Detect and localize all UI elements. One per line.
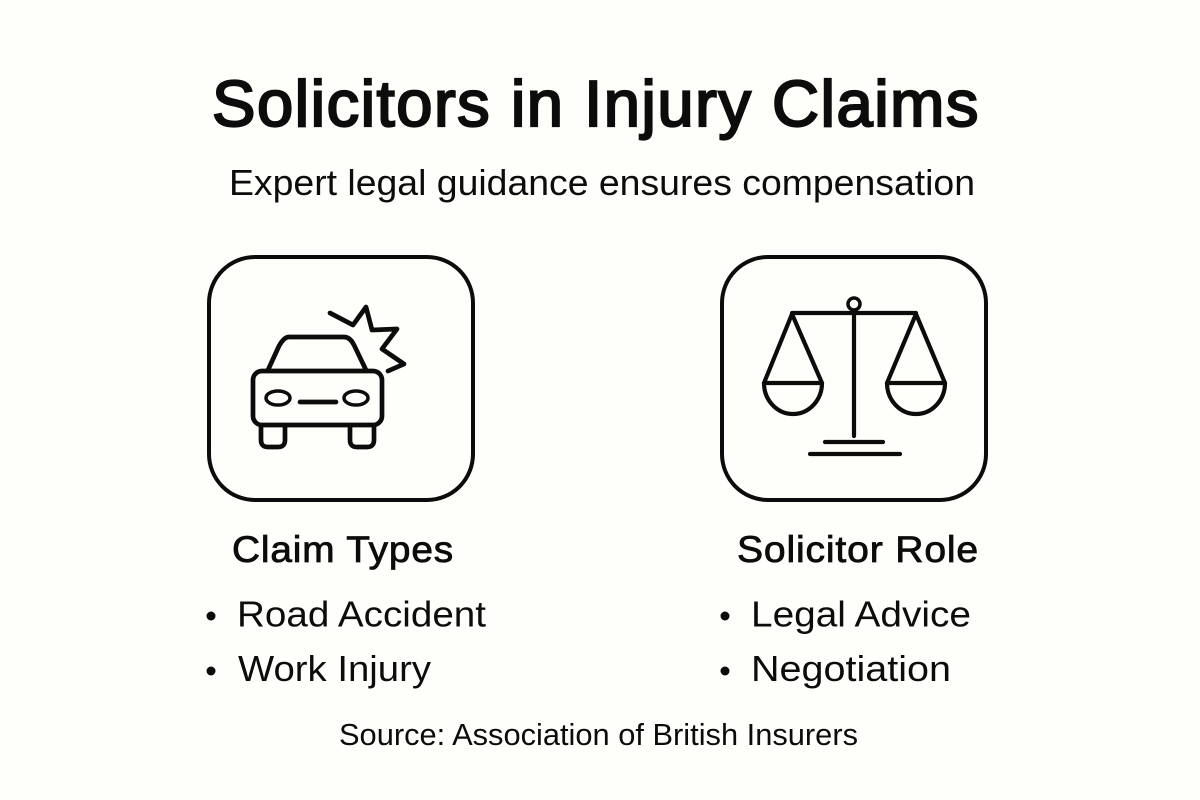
- subtitle: Expert legal guidance ensures compensation: [229, 162, 975, 203]
- list: solicitor role: Legal Advice: [751, 594, 971, 634]
- icon: scales of justice: [764, 298, 945, 454]
- heading: solicitor role: Solicitor Role: [737, 529, 979, 570]
- heading: claim types: Claim Types: [232, 529, 454, 570]
- icon: impact burst: [330, 307, 404, 371]
- icon frame: solicitor role: [722, 257, 986, 500]
- list: claim types: Road Accident: [237, 594, 486, 634]
- list: claim types: [206, 594, 486, 689]
- list: solicitor role: Negotiation: [751, 648, 951, 689]
- icon: car: [253, 337, 382, 447]
- panel: solicitor role icon: [722, 257, 986, 500]
- list: claim types: Work Injury: [238, 648, 431, 689]
- icon frame: claim types: [209, 257, 473, 500]
- source note: Source: Association of British Insurers: [339, 718, 858, 752]
- title: Solicitors in Injury Claims: [212, 67, 980, 140]
- list: solicitor role: [720, 594, 971, 689]
- panel: claim types icon: [209, 257, 473, 500]
